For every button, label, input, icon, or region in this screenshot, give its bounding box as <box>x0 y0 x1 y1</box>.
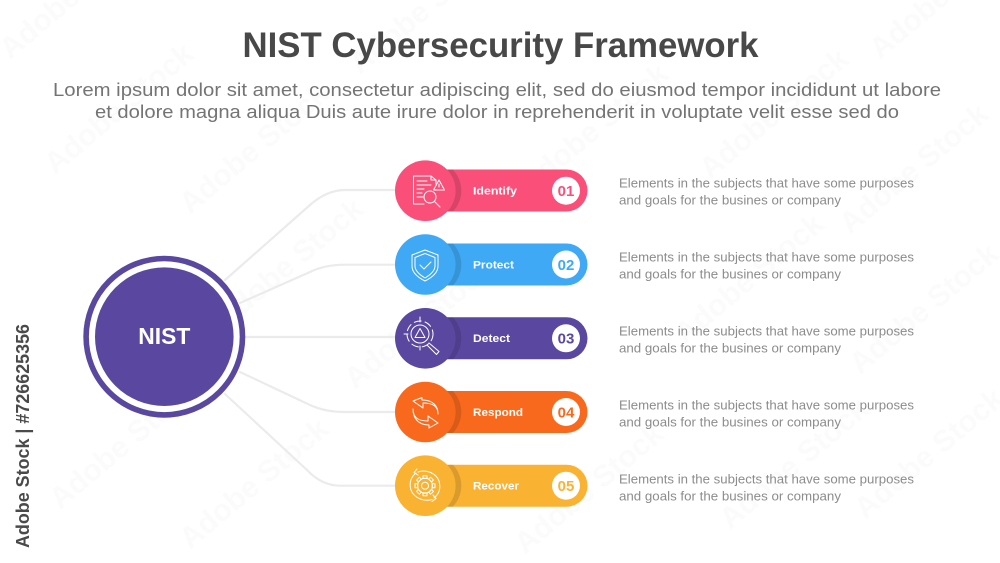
central NIST circle <box>86 258 242 415</box>
item 3: Detect: 03 <box>558 331 574 348</box>
icon: gear with recovery arrows <box>410 469 440 502</box>
side credit: Adobe Stock | #726625356 <box>13 324 33 548</box>
description 3: and goals for the busines or company <box>619 342 842 356</box>
background watermarks: Adobe Stock <box>508 417 670 560</box>
background watermarks: Adobe Stock <box>43 372 205 515</box>
background watermarks: Adobe Stock <box>338 252 500 395</box>
subtitle <box>53 79 941 122</box>
description 5: Elements in the subjects that have some purposes <box>619 472 914 486</box>
icon: target with magnifier <box>404 317 439 354</box>
background watermarks: Adobe Stock <box>173 77 335 220</box>
item 5: Recover: Recover <box>473 480 520 492</box>
item 1: Identify: 01 <box>558 183 574 200</box>
central NIST circle: NIST <box>138 323 190 349</box>
description 2: and goals for the busines or company <box>619 268 842 282</box>
description 5: and goals for the busines or company <box>619 490 842 504</box>
background watermarks: Adobe Stock <box>513 57 675 200</box>
item 5: Recover: 05 <box>558 478 574 495</box>
icon: document search <box>414 176 444 207</box>
subtitle: et dolore magna aliqua Duis aute irure dolor in reprehenderit in voluptate velit esse sed do <box>95 101 899 122</box>
background watermarks: Adobe Stock <box>693 42 855 185</box>
description 1 <box>619 176 914 208</box>
background watermarks: Adobe Stock <box>833 97 995 240</box>
item 1: Identify: Identify <box>473 186 518 198</box>
item 4: Respond <box>395 382 588 442</box>
item 3: Detect: Detect <box>473 333 510 345</box>
subtitle: Lorem ipsum dolor sit amet, consectetur adipiscing elit, sed do eiusmod tempor incididunt ut labore <box>53 79 941 100</box>
description 5 <box>619 472 914 504</box>
item 2: Protect: Protect <box>473 259 514 271</box>
description 3 <box>619 324 914 356</box>
icon: shield <box>412 250 438 281</box>
background watermarks: Adobe Stock <box>38 37 200 180</box>
item 4: Respond: 04 <box>558 404 575 421</box>
item 2: Protect: 02 <box>558 257 574 274</box>
item 4: Respond: Respond <box>473 407 523 419</box>
background watermarks: Adobe Stock <box>173 412 335 555</box>
item 5: Recover <box>395 455 588 516</box>
background watermarks: Adobe Stock <box>713 392 875 535</box>
description 4 <box>619 398 914 430</box>
description 1: Elements in the subjects that have some purposes <box>619 176 914 190</box>
background watermarks: Adobe Stock <box>668 207 830 350</box>
description 4: Elements in the subjects that have some purposes <box>619 398 914 412</box>
description 4: and goals for the busines or company <box>619 416 842 430</box>
title: NIST Cybersecurity Framework <box>242 26 759 65</box>
item 3: Detect <box>395 308 588 369</box>
description 2: Elements in the subjects that have some purposes <box>619 250 914 264</box>
description 1: and goals for the busines or company <box>619 194 842 208</box>
background watermarks: Adobe Stock <box>208 192 370 335</box>
description 2 <box>619 250 914 282</box>
description 3: Elements in the subjects that have some purposes <box>619 324 914 338</box>
item 2: Protect <box>395 234 588 295</box>
item 1: Identify <box>395 160 588 221</box>
connector lines <box>225 190 396 486</box>
icon: swap arrows <box>413 398 438 428</box>
